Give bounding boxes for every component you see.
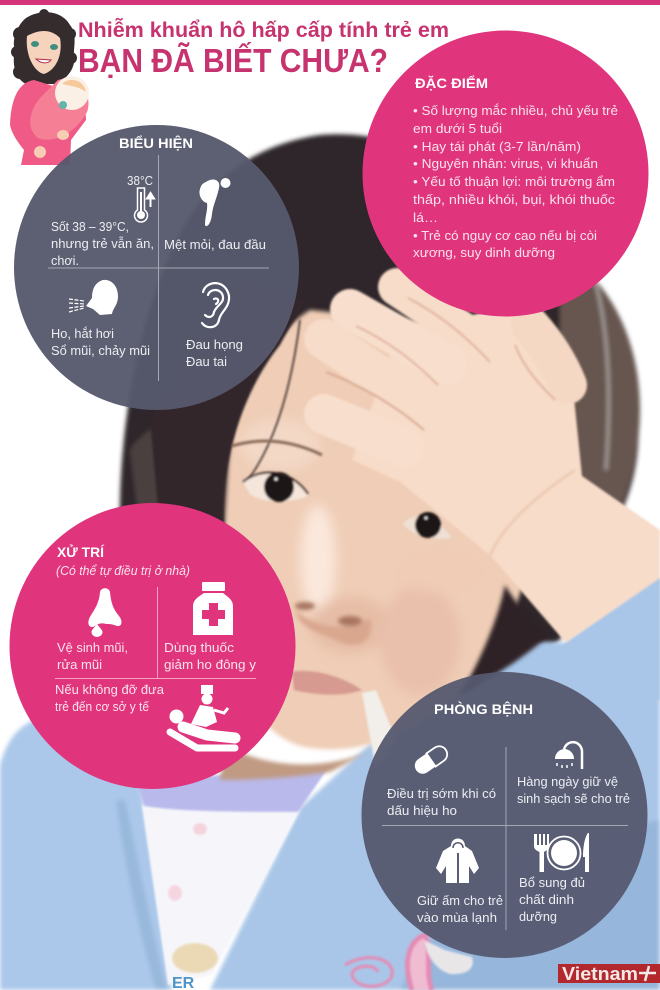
text: dùng thuốc: giảm ho đông y	[164, 657, 257, 672]
text: sốt: Sốt 38 – 39°C,	[51, 219, 129, 234]
bullet list: • Yếu tố thuận lợi: môi trường ẩm	[413, 174, 615, 189]
bullet list: • Hay tái phát (3-7 lần/năm)	[413, 139, 581, 154]
text: sốt	[51, 219, 154, 268]
text: nếu không đỡ	[55, 682, 165, 714]
photo: face	[220, 310, 530, 749]
subheading: (Có thể tự điều trị ở nhà)	[56, 563, 190, 578]
text: bổ sung	[519, 875, 585, 924]
bullet list: em dưới 5 tuổi	[413, 121, 502, 136]
text: vệ sinh mũi: rửa mũi	[57, 657, 102, 672]
icon: doctor and patient	[170, 685, 235, 748]
text: mệt mỏi: Mệt mỏi, đau đầu	[164, 237, 266, 252]
photo: left eye	[243, 472, 308, 502]
text: điều trị: dấu hiệu ho	[387, 803, 457, 818]
text: ho hắt hơi: Ho, hắt hơi	[51, 326, 114, 341]
photo: right eye	[403, 512, 452, 539]
text: bổ sung: dưỡng	[519, 909, 557, 924]
text: dùng thuốc: Dùng thuốc	[164, 640, 235, 655]
title line 1: Nhiễm khuẩn hô hấp cấp tính trẻ em	[78, 18, 449, 42]
text: ho hắt hơi: Sổ mũi, chảy mũi	[51, 343, 150, 358]
icon: coughing head	[69, 280, 118, 315]
photo: robe sleeve	[518, 578, 660, 700]
heading: PHÒNG BỆNH	[434, 700, 533, 717]
text: giữ ấm: vào mùa lạnh	[417, 910, 497, 925]
icon: tired person	[199, 178, 230, 226]
text: vệ sinh mũi	[57, 640, 128, 672]
text: điều trị	[387, 786, 496, 818]
text: giữ ấm	[417, 893, 503, 925]
panel circle	[362, 672, 648, 958]
heading: BIỂU HIỆN	[119, 134, 193, 151]
bullet list: • Số lượng mắc nhiều, chủ yếu trẻ	[413, 103, 618, 118]
text: sốt: nhưng trẻ vẫn ăn,	[51, 236, 154, 251]
panel: xử trí	[10, 503, 296, 789]
photo: neck	[220, 735, 400, 780]
mother hair	[11, 9, 77, 84]
panel: phòng bệnh	[362, 672, 648, 958]
photo: embroidery	[345, 935, 432, 990]
icon: thermometer: 38°C	[127, 173, 153, 188]
text: vệ sinh mũi: Vệ sinh mũi,	[57, 640, 128, 655]
dividers	[382, 747, 628, 930]
illustration: mother holding baby	[10, 9, 89, 165]
text: bổ sung: Bổ sung đủ	[519, 875, 585, 890]
bullet list: xương, suy dinh dưỡng	[413, 245, 555, 260]
top bar	[0, 0, 660, 5]
text: ho hắt hơi	[51, 326, 150, 358]
photo: white toy on robe	[424, 940, 473, 974]
bullet list: lá…	[413, 210, 438, 225]
icon: nose	[88, 588, 121, 637]
icon: coat	[436, 838, 479, 883]
text: vệ sinh: Hàng ngày giữ vệ	[517, 774, 618, 789]
bullet list: • Trẻ có nguy cơ cao nếu bị còi	[413, 228, 597, 243]
text: nếu không đỡ: trẻ đến cơ sở y tế	[55, 699, 150, 714]
baby head	[55, 76, 89, 110]
photo: dark hair beneath forearm	[462, 585, 550, 692]
text: đau họng: Đau họng	[186, 337, 243, 352]
bullet list	[413, 103, 618, 260]
heading: XỬ TRÍ	[57, 543, 105, 560]
photo: bangs	[150, 280, 322, 540]
dividers	[48, 155, 269, 381]
photo: thermometer	[362, 690, 396, 770]
photo: shirt and collar	[138, 768, 328, 985]
icon: pill	[412, 743, 450, 777]
panel circle	[14, 125, 299, 410]
heading: ĐẶC ĐIỂM	[415, 74, 488, 91]
text: vệ sinh	[517, 774, 630, 806]
photo: face shading	[240, 419, 485, 695]
mother eyes and mouth	[31, 41, 58, 63]
mother dress	[10, 80, 86, 165]
text: giữ ấm: Giữ ấm cho trẻ	[417, 893, 503, 908]
icon: medicine bottle	[193, 582, 233, 635]
text: vệ sinh: sinh sạch sẽ cho trẻ	[517, 791, 630, 806]
icon: plate and cutlery	[534, 833, 589, 872]
panel circle	[10, 503, 296, 789]
baby sling	[30, 79, 88, 140]
photo: hair	[120, 134, 640, 700]
text: sốt: chơi.	[51, 253, 79, 268]
logo: Vietnam+	[558, 964, 660, 984]
title line 2: BẠN ĐÃ BIẾT CHƯA?	[78, 42, 388, 79]
panel: đặc điểm	[362, 30, 648, 316]
mother face	[27, 31, 61, 74]
photo: nose	[295, 602, 371, 645]
title	[78, 18, 449, 79]
text: điều trị: Điều trị sớm khi có	[387, 786, 496, 801]
bullet list: thấp, nhiều khói, bụi, khói thuốc	[413, 192, 616, 207]
photo: hand and forearm	[324, 287, 660, 643]
photo: lips	[292, 671, 362, 695]
icon: ear	[202, 283, 229, 327]
photo: robe	[0, 578, 660, 990]
dividers	[55, 587, 256, 678]
icon: shower	[555, 742, 582, 769]
panel: biểu hiện	[14, 125, 299, 410]
text: dùng thuốc	[164, 640, 257, 672]
logo: Vietnam+: Vietnam	[562, 964, 638, 984]
mother hands	[34, 130, 69, 158]
bullet list: • Nguyên nhân: virus, vi khuẩn	[413, 156, 598, 171]
panel circle	[362, 30, 648, 316]
text: bổ sung: chất dinh	[519, 892, 574, 907]
text: nếu không đỡ: Nếu không đỡ đưa	[55, 682, 165, 697]
text: đau họng: Đau tai	[186, 354, 227, 369]
text: đau họng	[186, 337, 243, 369]
icon: thermometer	[127, 173, 154, 222]
